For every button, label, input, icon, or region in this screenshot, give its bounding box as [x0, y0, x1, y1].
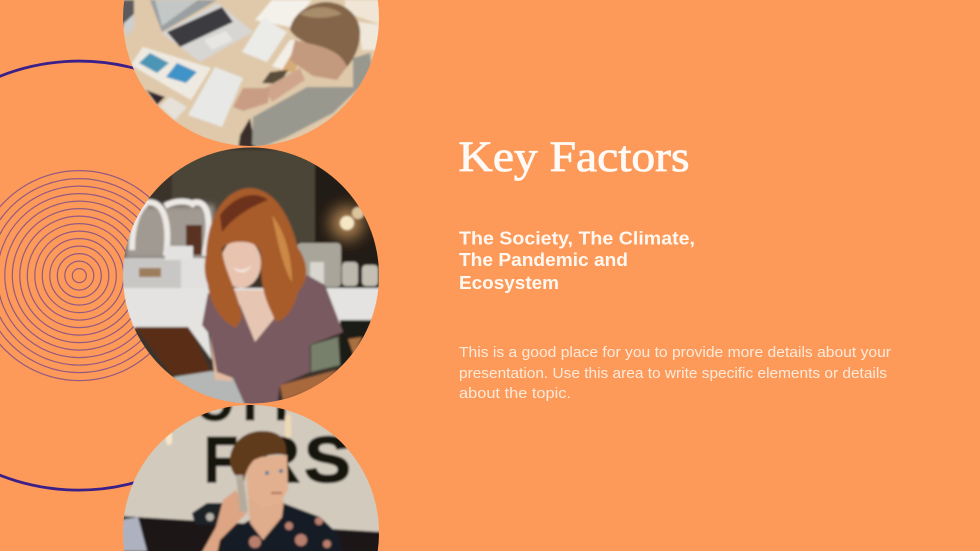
open book with blue maps	[131, 47, 211, 100]
body text: presentation. Use this area to write specific elements or details	[459, 365, 887, 382]
shirt	[218, 503, 344, 551]
face	[221, 238, 261, 288]
dark bench	[120, 516, 382, 551]
photo: smiling woman with red hair at laptop	[120, 145, 382, 407]
right bench	[338, 318, 372, 368]
title: Key Factors	[458, 134, 690, 181]
shirt flowers	[249, 517, 331, 548]
body text: This is a good place for you to provide more details about your	[459, 344, 891, 361]
arm and hand	[265, 68, 305, 102]
neck	[248, 497, 284, 540]
wall lettering	[200, 405, 350, 485]
chest	[234, 289, 276, 343]
pendant lights	[166, 432, 172, 445]
photo: man on phone in front of lettered wall	[123, 405, 379, 551]
hair	[290, 2, 360, 67]
white keyboard	[188, 67, 243, 127]
lights	[331, 207, 363, 239]
bag strap	[280, 370, 337, 400]
chair and dark lower area	[262, 70, 288, 84]
glassware and cups	[297, 243, 341, 287]
body text	[459, 344, 891, 402]
subtitle	[459, 228, 695, 293]
face	[245, 455, 288, 508]
concentric rings decoration	[0, 171, 184, 381]
body text: about the topic.	[459, 385, 571, 402]
tattoo arm	[311, 337, 340, 372]
subtitle: The Society, The Climate,	[459, 228, 695, 248]
wall lettering: OTT	[196, 378, 296, 431]
cabinet and counter	[123, 256, 182, 290]
laptop	[173, 371, 248, 405]
wall lettering: F	[204, 423, 238, 496]
dark table	[135, 327, 212, 375]
shirt	[252, 53, 372, 148]
right keyboard	[242, 18, 287, 62]
hair	[205, 188, 306, 328]
wall lettering: S	[304, 423, 351, 496]
subtitle: The Pandemic and	[459, 249, 628, 270]
subtitle: Ecosystem	[459, 272, 559, 293]
photo: man at desk with laptop and keyboards	[120, 0, 382, 150]
hair	[230, 431, 286, 482]
wall lettering: R	[252, 423, 300, 496]
blurred background behind chairs	[124, 205, 214, 260]
shirt	[202, 275, 343, 405]
face	[290, 40, 353, 80]
left blurred figure	[120, 517, 147, 551]
white chairs	[132, 202, 209, 256]
bottom purple arc	[0, 474, 135, 490]
left arm	[210, 336, 232, 381]
hand with phone	[201, 490, 247, 551]
laptop	[150, 0, 217, 32]
top purple arc	[0, 61, 135, 77]
